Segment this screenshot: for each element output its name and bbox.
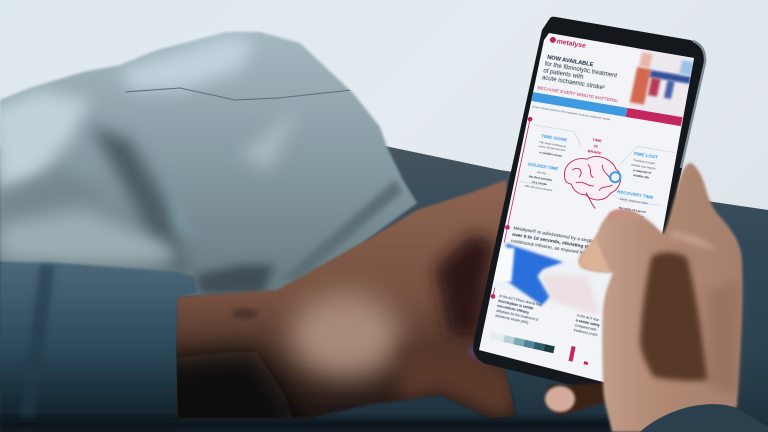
bottom shadow <box>0 418 640 432</box>
headline: NOW AVAILABLE <box>546 55 594 69</box>
time gone text: every minute lost and <box>538 144 566 153</box>
intro line: Every minute counts in the treatment of acute ischaemic stroke <box>532 104 611 121</box>
golden time text: of a stroke <box>532 180 548 186</box>
recovery time text: the odds of a good <box>618 205 646 214</box>
time gone text: TIME GONE <box>541 133 567 143</box>
headline: of patients with <box>543 68 584 81</box>
headline: for the fibrinolytic treatment <box>544 62 618 80</box>
lower infographic <box>490 294 600 366</box>
lower paragraph left: alteplase for the treatment of <box>496 309 539 322</box>
time is brain: IS <box>593 143 599 149</box>
lower paragraph right: In the ACT trial <box>577 313 599 322</box>
time lost text: Treating in a later <box>633 158 656 166</box>
right cuff <box>640 404 768 432</box>
blue sleeve <box>0 262 197 432</box>
golden time text <box>524 162 558 192</box>
brain illustration <box>564 156 622 209</box>
lower paragraph left: tenecteplase is similar <box>498 299 535 311</box>
time gone text: The clock is ticking on <box>539 140 567 149</box>
icon: clock gear <box>609 171 621 183</box>
timeline <box>491 116 533 295</box>
recovery time text: recovery increase <box>618 210 645 219</box>
logo: metalyse <box>556 38 587 50</box>
recovery time text: RECOVERY TIME <box>617 189 654 200</box>
time is brain <box>588 138 602 154</box>
golden time text: offer the best outcome <box>524 183 553 192</box>
body paragraph: continuous infusion, as required for <box>510 238 586 257</box>
photo of stretcher <box>629 49 695 117</box>
headline <box>537 54 624 103</box>
connector lines <box>520 124 676 206</box>
recovery time text: Earlier treatment offers <box>620 196 649 205</box>
upper infographic <box>485 32 695 326</box>
lower paragraph left <box>495 294 543 327</box>
golden time text: the first minutes <box>529 174 553 182</box>
colour band <box>527 91 683 126</box>
time lost text <box>630 152 658 178</box>
shadow on fingers <box>640 252 708 381</box>
time lost text: healthy life <box>633 173 650 180</box>
lower paragraph right: treatment of AIS <box>573 328 599 338</box>
body paragraph <box>510 226 594 254</box>
lower paragraph left: non-inferior efficacy <box>497 304 530 315</box>
golden time text: the first <box>537 170 547 176</box>
headline: acute ischaemic stroke¹ <box>541 75 605 92</box>
left hand <box>175 179 517 419</box>
lower paragraph right: compared with <box>575 323 597 332</box>
time lost text: a majority of <box>633 168 653 175</box>
headline: BECAUSE EVERY MINUTE MATTERS! <box>537 85 618 103</box>
left mini chart <box>489 332 555 353</box>
lower paragraph right: a similar safety <box>576 318 600 328</box>
time lost text: TIME LOST <box>633 151 659 160</box>
right mini chart <box>569 346 591 365</box>
time gone text: a sudden onset <box>539 150 562 158</box>
logo <box>550 36 586 48</box>
time is brain: TIME <box>592 137 603 143</box>
time gone text <box>538 134 568 157</box>
time lost text: window may lead to <box>631 163 656 171</box>
lower paragraph left: In the ACT Ethos clinical trial, <box>499 294 543 307</box>
phone body <box>473 17 705 396</box>
lower timeline dot <box>490 294 496 299</box>
recovery time text <box>617 190 654 218</box>
right hand <box>578 163 743 432</box>
phone screen <box>479 33 694 382</box>
lower paragraph right <box>574 314 600 336</box>
dark table <box>0 146 768 432</box>
time is brain: BRAIN! <box>587 148 602 155</box>
lower paragraph left: ischaemic stroke (AIS) <box>495 314 529 325</box>
golden time text: GOLDEN TIME <box>527 162 559 172</box>
body paragraph: Metalyse® is administered by a single <box>513 224 595 245</box>
lower fingertip <box>545 383 606 416</box>
grey hoodie <box>0 32 417 296</box>
body paragraph: over 5 to 10 seconds, obviating the <box>511 232 593 251</box>
gloved hand image <box>492 242 600 314</box>
